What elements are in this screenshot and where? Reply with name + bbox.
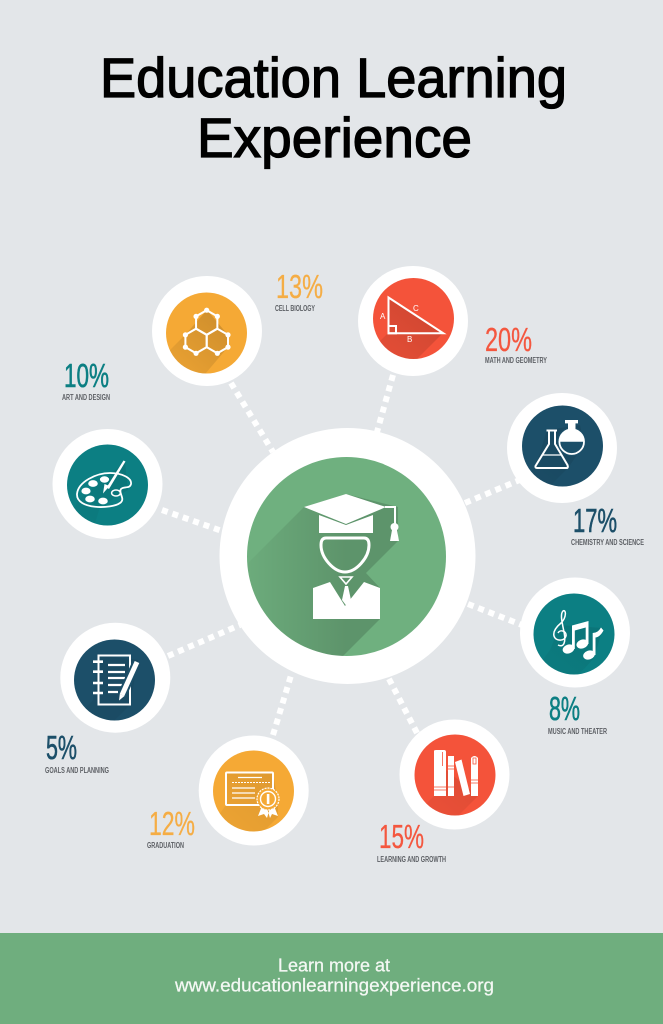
stat: chemistry and science: 17%	[573, 502, 617, 539]
icon: certificate and seal	[226, 772, 279, 818]
icon: triangle: A	[380, 312, 386, 321]
central graduate badge	[220, 428, 476, 684]
icon: hexagon molecule	[183, 308, 231, 356]
icon shadow	[263, 494, 398, 656]
icon: notepad and pen	[93, 656, 137, 704]
node: chemistry and science	[507, 393, 617, 503]
stat: goals and planning: GOALS AND PLANNING	[45, 766, 109, 775]
stat: goals and planning: 5%	[46, 729, 77, 766]
node: cell biology	[150, 276, 262, 386]
footer text	[174, 956, 494, 996]
node: goals and planning	[60, 622, 170, 733]
icon: flasks	[535, 420, 585, 468]
icon: triangle: B	[407, 335, 412, 344]
stat: cell biology: 13%	[276, 268, 323, 305]
stat: music and theater: MUSIC AND THEATER	[548, 727, 607, 736]
node: art and design	[52, 429, 162, 540]
icon: palette	[77, 460, 131, 507]
title: Education Learning	[100, 46, 567, 109]
stat: graduation	[147, 805, 195, 850]
stat: art and design: 10%	[64, 357, 109, 394]
stat: music and theater: 8%	[549, 690, 580, 727]
icon: music notes	[554, 611, 604, 661]
stat: graduation: GRADUATION	[147, 841, 184, 850]
stat: cell biology: CELL BIOLOGY	[275, 304, 315, 313]
stat: music and theater	[548, 690, 607, 736]
stat: math and geometry: MATH AND GEOMETRY	[485, 356, 547, 365]
footer band	[0, 933, 663, 1024]
stat: goals and planning	[45, 729, 109, 775]
icon: triangle	[380, 298, 443, 344]
footer text: Learn more at	[278, 956, 390, 976]
node: math and geometry	[358, 266, 468, 376]
node: graduation	[198, 736, 309, 846]
node: learning and growth	[396, 720, 510, 834]
title: Experience	[197, 106, 472, 169]
stat: art and design: ART AND DESIGN	[62, 393, 110, 402]
node: music and theater	[520, 578, 630, 690]
stat: learning and growth: 15%	[379, 818, 424, 855]
stat: math and geometry: 20%	[485, 321, 532, 358]
dotted connectors	[162, 375, 522, 735]
stat: art and design	[62, 357, 110, 402]
icon: graduate	[304, 494, 399, 619]
footer text: www.educationlearningexperience.org	[174, 976, 494, 996]
stat: cell biology	[275, 268, 323, 313]
stat: learning and growth: LEARNING AND GROWTH	[377, 855, 446, 864]
title	[100, 46, 567, 169]
stat: graduation: 12%	[149, 805, 195, 842]
icon: books	[434, 750, 478, 796]
icon: triangle: C	[413, 304, 419, 313]
